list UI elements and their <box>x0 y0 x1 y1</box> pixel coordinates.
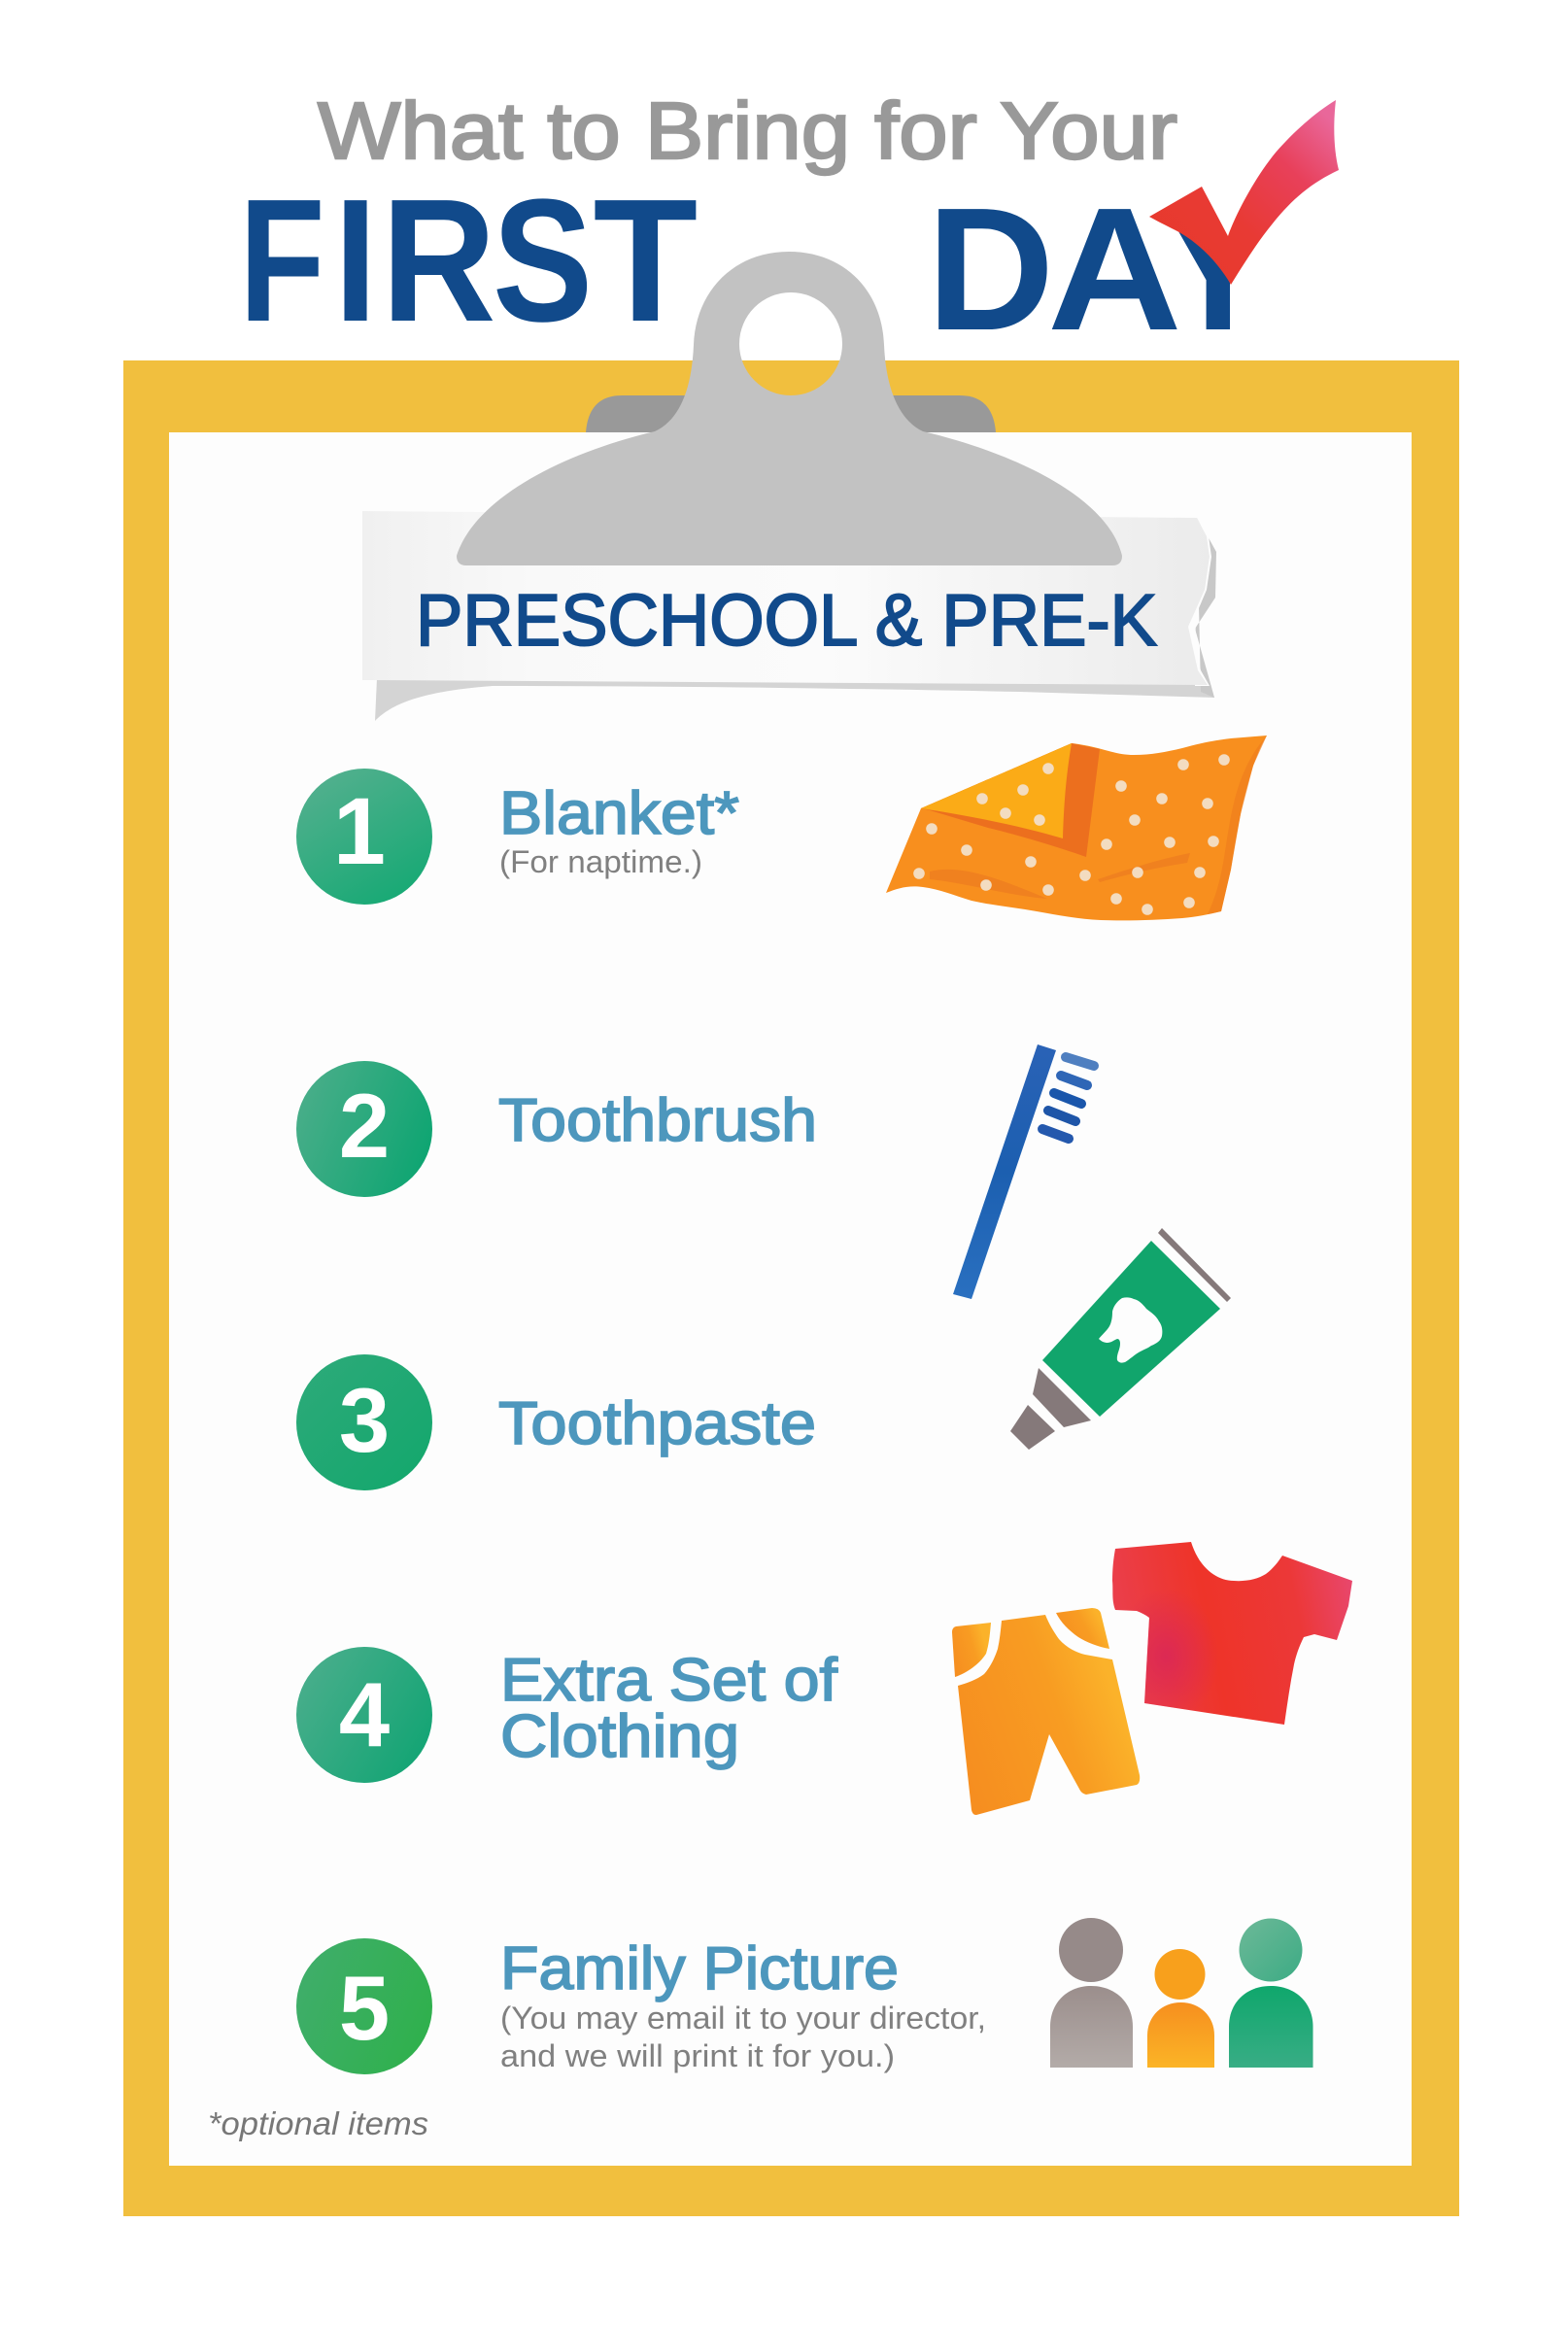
icon: metal clip <box>457 252 1122 565</box>
item 4: extra clothing <box>296 1535 1360 1815</box>
icon: toothpaste tube <box>1010 1228 1231 1450</box>
item heading: Extra Set of Clothing: Extra Set of <box>500 1647 838 1714</box>
strip torn edge highlight <box>1191 518 1211 686</box>
item heading: Toothpaste: Toothpaste <box>498 1390 816 1457</box>
item heading: Toothbrush: Toothbrush <box>498 1087 817 1154</box>
number badge 2: 2 <box>339 1075 390 1177</box>
blanket right edge shade <box>1208 735 1267 914</box>
item 2: toothbrush <box>296 1044 1094 1299</box>
blanket streaks <box>930 853 1190 899</box>
item note: email to director <box>500 2001 986 2073</box>
item heading: Family Picture: Family Picture <box>500 1935 899 2002</box>
strip curl shadow <box>375 678 1214 721</box>
strip torn edge shadow <box>1195 518 1216 698</box>
number badge 1 <box>296 769 432 905</box>
title word: DAY: A <box>1047 172 1182 367</box>
icon: red shirt <box>1112 1542 1352 1725</box>
item heading: Extra Set of Clothing <box>500 1647 838 1770</box>
title line: What to Bring for Your: What to Bring for Your <box>318 86 1177 176</box>
footnote: optional items: *optional items <box>208 2105 428 2141</box>
item note: for naptime: (For naptime.) <box>499 844 702 879</box>
shirt magenta wash <box>1140 1608 1208 1709</box>
title word: DAY: Y <box>1163 172 1273 367</box>
number badge 4: 4 <box>339 1663 390 1765</box>
icon: orange polka-dot blanket <box>886 735 1267 920</box>
item 5: family picture <box>296 1918 1313 2074</box>
title word: FIRST: F <box>239 162 325 359</box>
title <box>239 86 1273 367</box>
blanket fold <box>921 743 1100 857</box>
strip paper <box>362 511 1210 685</box>
title word: DAY <box>927 172 1273 367</box>
title word: FIRST: I <box>334 163 377 359</box>
title word: FIRST: T <box>593 162 698 358</box>
panel: clipboard board <box>123 360 1459 2216</box>
panel: paper sheet <box>169 432 1412 2166</box>
icon: red check mark <box>1149 100 1339 285</box>
title word: DAY: D <box>927 172 1054 367</box>
item heading: Blanket: Blanket* <box>499 780 739 847</box>
number badge 5: 5 <box>339 1957 390 2059</box>
strip heading: PRESCHOOL & PRE-K <box>416 579 1157 661</box>
icon: orange shorts <box>952 1608 1140 1815</box>
clip back bar <box>586 395 996 432</box>
number badge 2 <box>296 1061 432 1197</box>
number badge 5 <box>296 1938 432 2074</box>
icon: family figures <box>1050 1918 1313 2068</box>
label strip: Preschool and Pre-K <box>362 511 1216 721</box>
title word: FIRST <box>239 162 698 359</box>
item heading: Extra Set of Clothing: Clothing <box>500 1703 739 1770</box>
title word: FIRST: R <box>382 163 496 359</box>
item 1: blanket <box>296 735 1267 920</box>
item 3: toothpaste <box>296 1228 1231 1490</box>
number badge 3: 3 <box>339 1369 390 1471</box>
icon: blue toothbrush <box>953 1044 1094 1299</box>
number badge 3 <box>296 1354 432 1490</box>
number badge 4 <box>296 1647 432 1783</box>
item note: email to director: (You may email it to your director, <box>500 2001 986 2035</box>
blanket folded corner <box>921 743 1072 838</box>
item note: email to director: and we will print it for you.) <box>500 2038 895 2073</box>
title word: FIRST: S <box>493 162 593 359</box>
number badge 1: 1 <box>333 778 386 884</box>
